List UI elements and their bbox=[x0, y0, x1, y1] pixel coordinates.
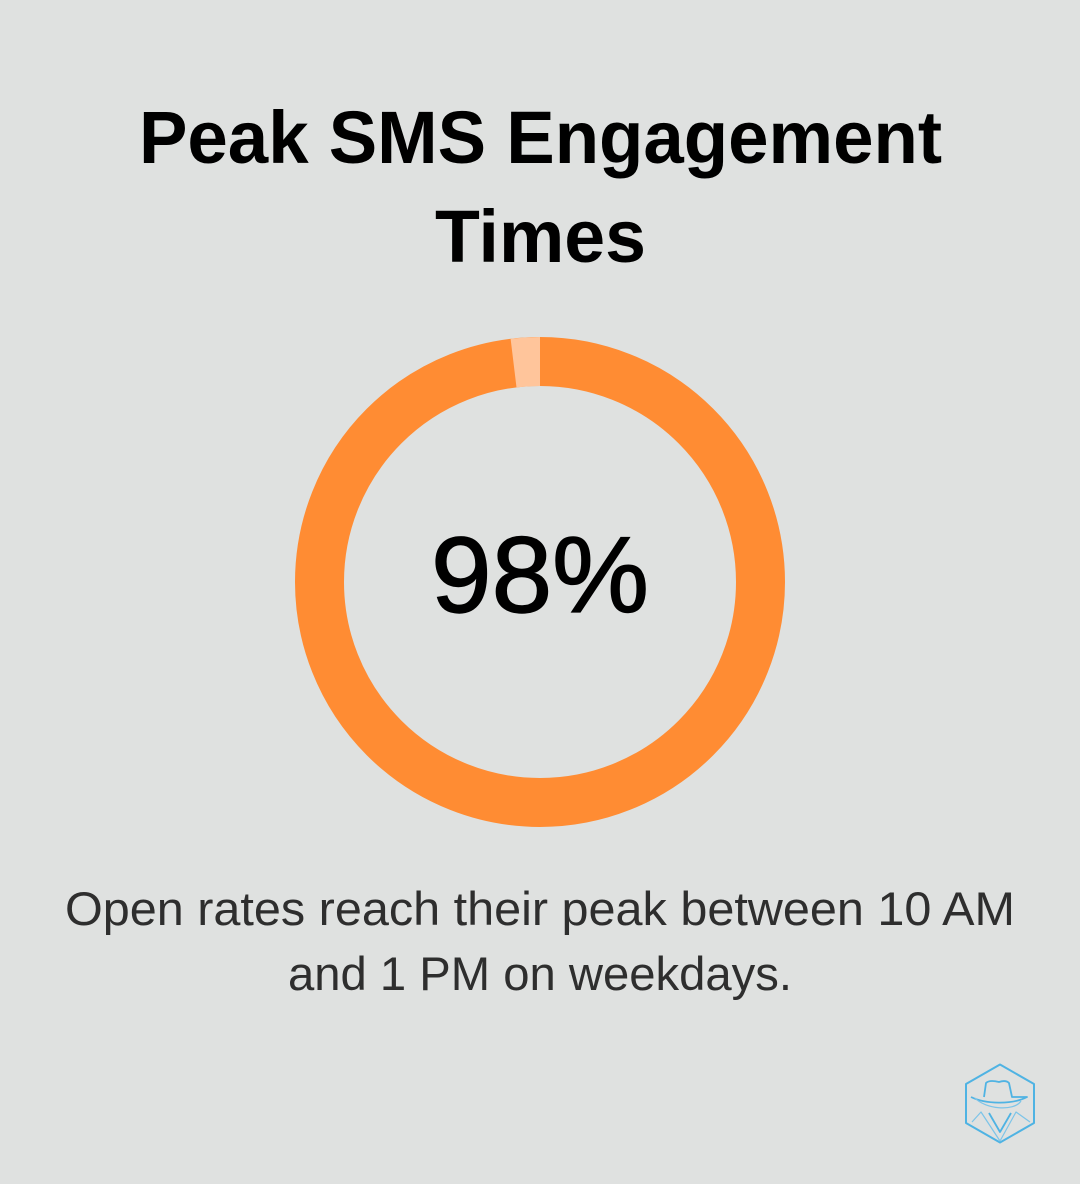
title: Peak SMS Engagement bbox=[139, 96, 942, 179]
description text: Open rates reach their peak between 10 AM bbox=[65, 882, 1015, 935]
description text bbox=[65, 882, 1015, 1000]
title bbox=[139, 96, 942, 278]
title: Times bbox=[435, 195, 646, 278]
donut chart: 98% bbox=[320, 337, 760, 802]
icon: spy logo hexagon bbox=[966, 1064, 1034, 1142]
description text: and 1 PM on weekdays. bbox=[288, 947, 792, 1000]
donut value: 98% bbox=[431, 514, 649, 635]
